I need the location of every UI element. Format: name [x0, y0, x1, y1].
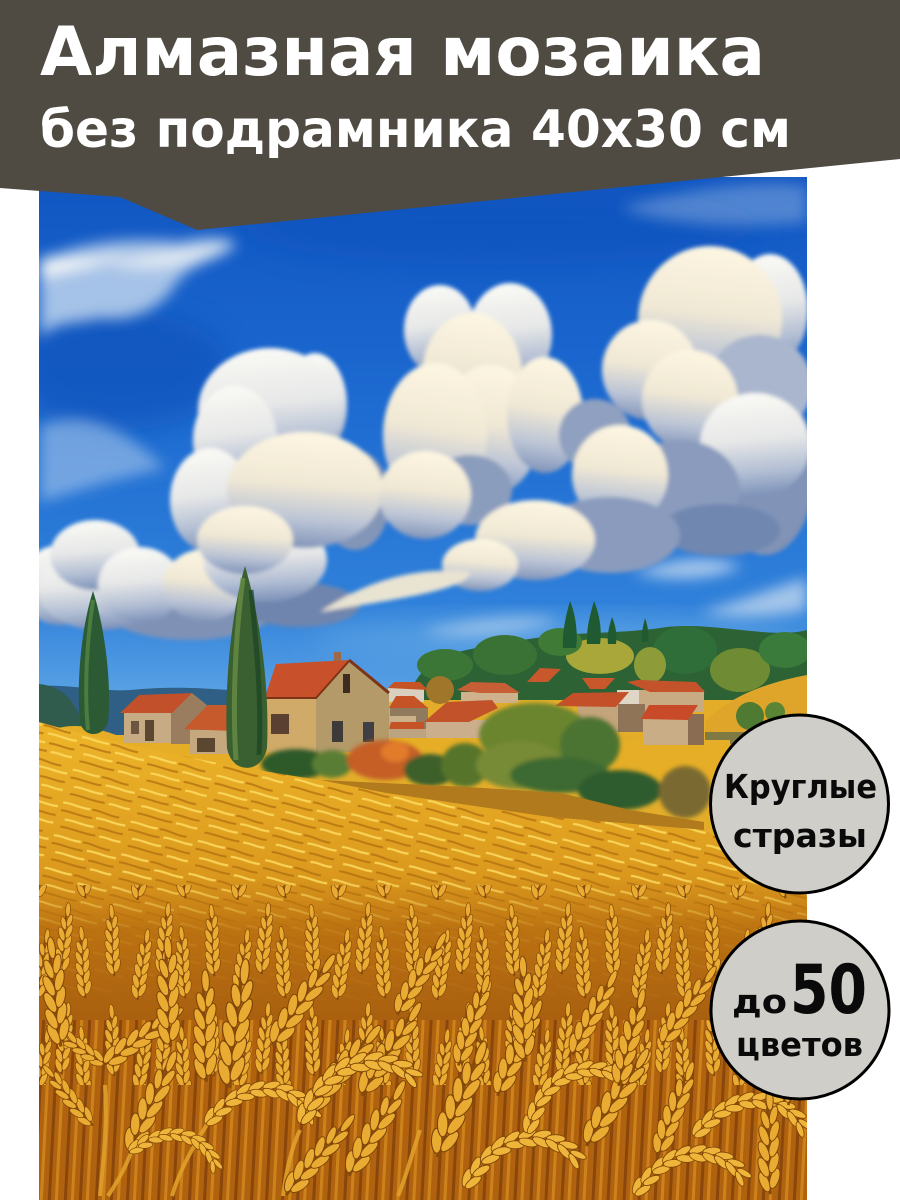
village houses — [120, 652, 705, 754]
shrubs — [261, 703, 711, 818]
background wheat — [59, 726, 730, 745]
subtitle: без подрамника 40х30 см — [40, 100, 791, 160]
sky — [10, 177, 810, 707]
badge: up to 50 colours: 50 — [790, 951, 867, 1030]
badge: round rhinestones: стразы — [733, 816, 867, 855]
badge: round rhinestones: Круглые — [724, 767, 877, 806]
ground behind village — [116, 700, 733, 836]
foreground wheat stems — [100, 1085, 420, 1196]
painting: wheat field landscape — [10, 177, 831, 1200]
right cloud tower — [320, 246, 815, 612]
cumulus clouds — [20, 246, 815, 640]
distant hills and tree line — [39, 601, 811, 745]
top banner — [0, 0, 900, 230]
wispy clouds — [40, 183, 807, 636]
central cloud tower — [379, 283, 552, 539]
dirt path — [320, 780, 704, 830]
middle houses — [389, 692, 704, 745]
wheat field — [39, 722, 807, 1200]
title: Алмазная мозаика — [40, 13, 765, 92]
badge: up to 50 colours: цветов — [736, 1025, 863, 1064]
main house — [265, 652, 389, 754]
lower cloud bank — [20, 518, 360, 640]
badge: round rhinestones — [710, 715, 888, 893]
left cloud tower — [170, 348, 390, 574]
left houses — [120, 693, 232, 754]
back houses — [388, 668, 705, 712]
cypress trees — [79, 566, 267, 768]
badge: up to 50 colours: до — [732, 982, 787, 1021]
foreground wheat ears — [32, 926, 831, 1200]
badge: up to 50 colours — [711, 921, 889, 1099]
